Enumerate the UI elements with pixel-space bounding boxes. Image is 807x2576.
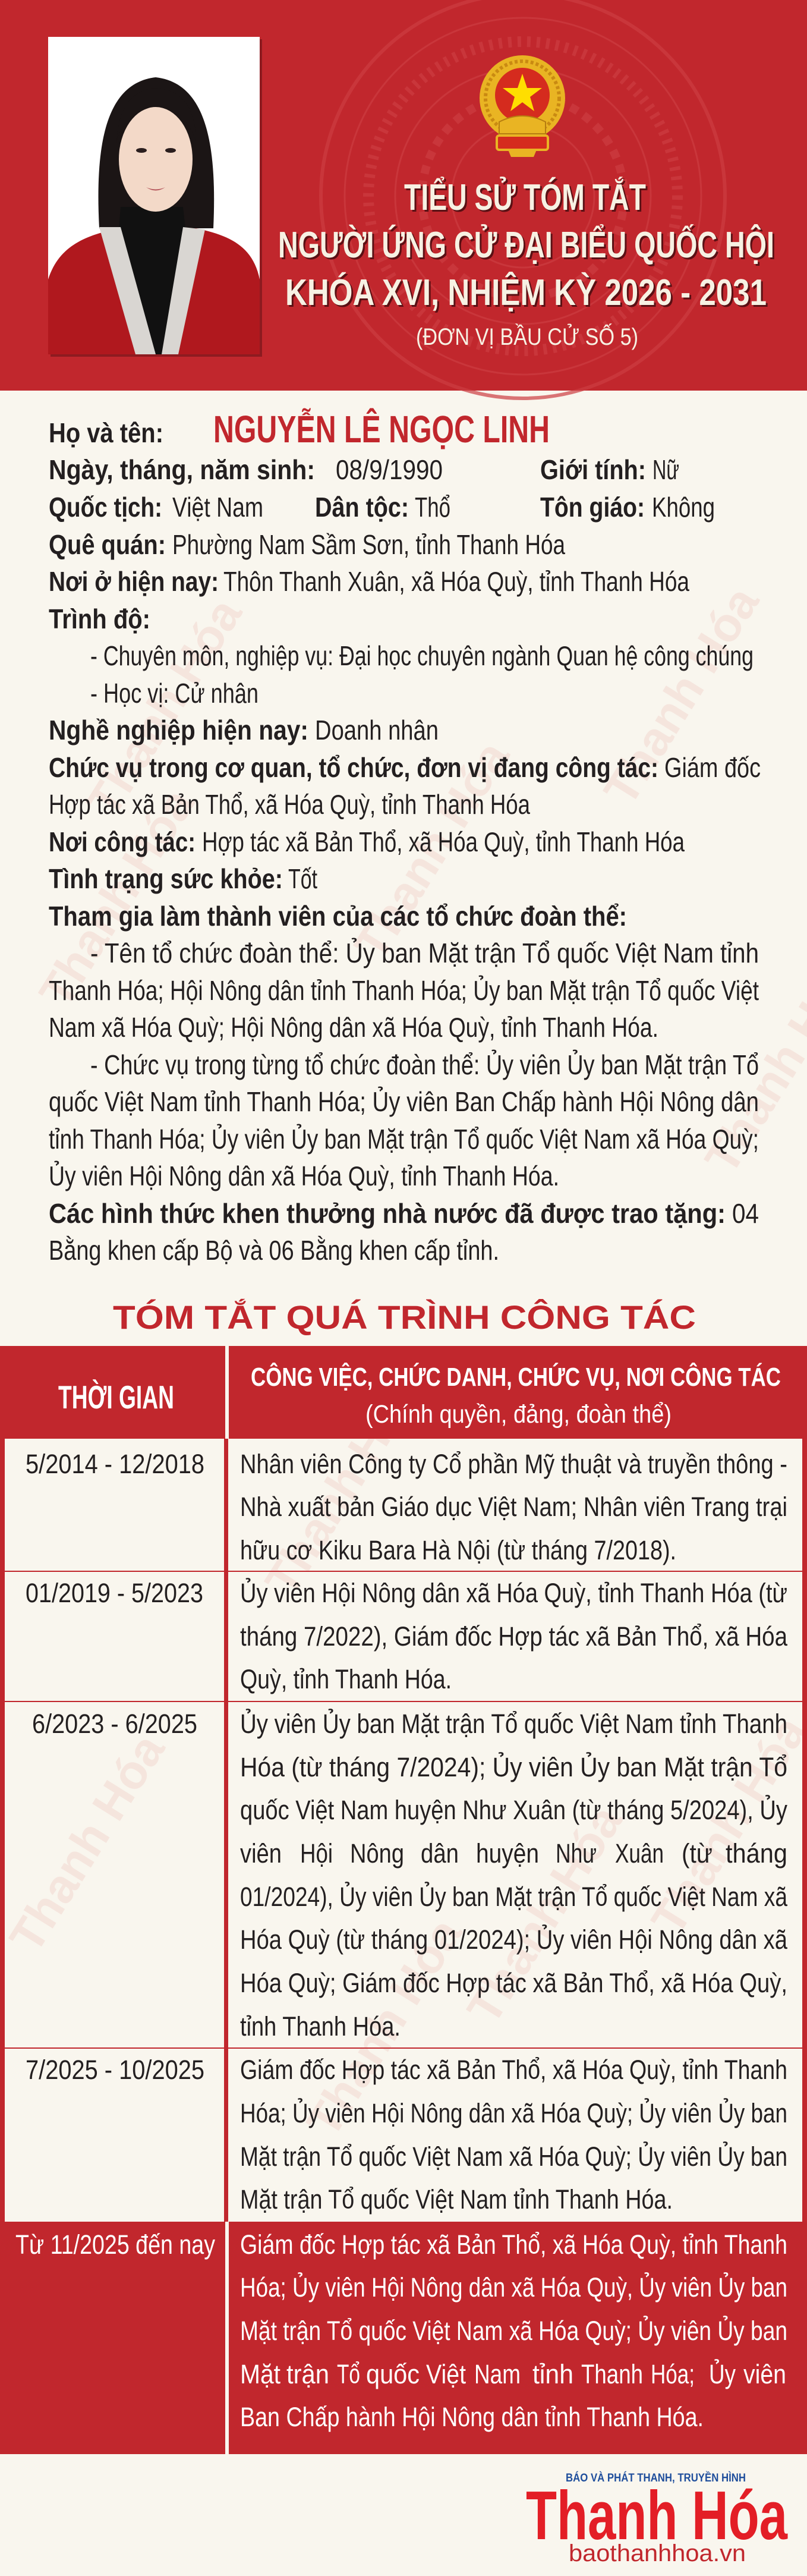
title: TIỂU SỬ TÓM TẮT xyxy=(404,177,646,218)
birth date and gender: Giới tính: xyxy=(540,454,646,485)
education: Trình độ: xyxy=(49,603,150,634)
row 3: huyện xyxy=(476,1838,539,1869)
watermarks: Thanh Hóa xyxy=(77,589,252,826)
row 3: tháng xyxy=(726,1838,787,1869)
awards xyxy=(49,1198,759,1266)
row 3: Như xyxy=(556,1838,597,1869)
watermarks: Thanh Hóa xyxy=(297,1909,472,2146)
residence: Thôn Thanh Xuân, xã Hóa Quỳ, tỉnh Thanh Hóa xyxy=(223,566,689,597)
row 5 (current, highlighted) xyxy=(0,2222,807,2454)
row 5 (current, highlighted): Hóa; xyxy=(651,2359,695,2389)
organizations membership: Nam xã Hóa Quỳ; Hội Nông dân xã Hóa Quỳ, tỉnh Thanh Hóa. xyxy=(49,1012,658,1043)
row 5 (current, highlighted): trận xyxy=(286,2359,329,2389)
row 2: Quỳ, tỉnh Thanh Hóa. xyxy=(240,1664,452,1694)
residence xyxy=(49,566,689,597)
row 5 (current, highlighted): Thanh xyxy=(581,2359,643,2389)
watermarks: Thanh Hóa xyxy=(29,779,204,1016)
workplace xyxy=(49,826,685,857)
education xyxy=(49,603,754,709)
row 1: hữu cơ Kiku Bara Hà Nội (từ tháng 7/2018). xyxy=(240,1535,676,1565)
row 4: Mặt trận Tổ quốc Việt Nam tỉnh Thanh Hóa. xyxy=(240,2184,673,2215)
table header: (Chính quyền, đảng, đoàn thể) xyxy=(365,1400,672,1429)
organizations membership: Tham gia làm thành viên của các tổ chức đoàn thể: xyxy=(49,901,627,932)
watermarks: Thanh Hóa xyxy=(594,577,769,814)
position: Hợp tác xã Bản Thổ, xã Hóa Quỳ, tỉnh Thanh Hóa xyxy=(49,789,530,820)
awards: Các hình thức khen thưởng nhà nước đã được trao tặng: xyxy=(49,1198,726,1229)
row 3: (từ xyxy=(682,1838,713,1869)
publisher logo: BÁO VÀ PHÁT THANH, TRUYỀN HÌNH xyxy=(566,2471,746,2484)
row 5 (current, highlighted): Việt xyxy=(426,2359,466,2389)
work history table xyxy=(0,1346,807,2454)
personal info block xyxy=(49,407,761,1266)
organizations membership xyxy=(49,901,759,1191)
row 5 (current, highlighted): Mặt xyxy=(240,2359,280,2389)
row 5 (current, highlighted): quốc xyxy=(366,2359,420,2389)
row 1 xyxy=(26,1449,787,1565)
row 4 xyxy=(26,2055,787,2215)
nationality, ethnicity, religion: Quốc tịch: xyxy=(49,492,162,523)
row 1: 5/2014 - 12/2018 xyxy=(26,1449,204,1479)
table header: THỜI GIAN xyxy=(58,1379,174,1416)
nationality, ethnicity, religion: Thổ xyxy=(415,492,450,523)
row 3: 6/2023 - 6/2025 xyxy=(32,1709,197,1739)
title xyxy=(278,177,776,315)
nationality, ethnicity, religion xyxy=(49,492,715,523)
occupation: Doanh nhân xyxy=(315,715,439,746)
organizations membership: Ủy viên Hội Nông dân xã Hóa Quỳ, tỉnh Thanh Hóa. xyxy=(49,1160,559,1191)
row 3: Nông xyxy=(350,1838,404,1869)
hometown: Quê quán: xyxy=(49,529,166,560)
nationality, ethnicity, religion: Việt Nam xyxy=(172,492,263,523)
header banner xyxy=(0,0,807,398)
awards: 04 xyxy=(732,1198,759,1229)
row 3: tỉnh Thanh Hóa. xyxy=(240,2011,401,2042)
watermarks xyxy=(0,577,807,2146)
nationality, ethnicity, religion: Dân tộc: xyxy=(315,492,409,523)
watermarks: Thanh Hóa xyxy=(255,1368,430,1605)
title: TIỂU SỬ TÓM TẮT xyxy=(406,179,648,220)
publisher logo: baothanhhoa.vn xyxy=(569,2540,746,2566)
name xyxy=(49,407,550,451)
watermarks: Thanh Hóa xyxy=(0,1725,175,1961)
birth date and gender xyxy=(49,454,679,485)
row 4: 7/2025 - 10/2025 xyxy=(26,2055,204,2085)
row 5 (current, highlighted): Từ 11/2025 đến nay xyxy=(15,2229,215,2260)
section heading: work history: TÓM TẮT QUÁ TRÌNH CÔNG TÁC xyxy=(113,1298,696,1336)
row 3: Hội xyxy=(300,1838,333,1869)
education: - Học vị: Cử nhân xyxy=(90,678,259,709)
icon: national emblem xyxy=(480,55,565,157)
row 5 (current, highlighted): viên xyxy=(743,2359,786,2389)
awards: Bằng khen cấp Bộ và 06 Bằng khen cấp tỉnh. xyxy=(49,1235,499,1266)
position: Chức vụ trong cơ quan, tổ chức, đơn vị đang công tác: xyxy=(49,752,658,783)
row 5 (current, highlighted): tỉnh xyxy=(532,2359,573,2389)
health: Tốt xyxy=(288,863,317,894)
workplace: Hợp tác xã Bản Thổ, xã Hóa Quỳ, tỉnh Thanh Hóa xyxy=(202,826,685,857)
position xyxy=(49,752,761,820)
health: Tình trạng sức khỏe: xyxy=(49,863,283,894)
name: Họ và tên: xyxy=(49,417,163,448)
row 3: viên xyxy=(240,1838,282,1869)
row 2 xyxy=(26,1578,788,1694)
row 3: Xuân xyxy=(615,1838,664,1869)
position: Giám đốc xyxy=(664,752,761,783)
watermarks: Thanh Hóa xyxy=(344,732,519,968)
birth date and gender: Ngày, tháng, năm sinh: xyxy=(49,454,315,485)
table body frame xyxy=(0,1439,807,2222)
hometown: Phường Nam Sầm Sơn, tỉnh Thanh Hóa xyxy=(172,529,565,560)
name: NGUYỄN LÊ NGỌC LINH xyxy=(213,407,550,451)
row 5 (current, highlighted): Ban Chấp hành Hội Nông dân tỉnh Thanh Hóa. xyxy=(240,2402,704,2432)
row 5 (current, highlighted): Ủy xyxy=(709,2359,736,2389)
row 2: 01/2019 - 5/2023 xyxy=(26,1578,203,1608)
row 5 (current, highlighted): Nam xyxy=(474,2359,521,2389)
row 3: dân xyxy=(421,1838,459,1869)
watermarks: Thanh Hóa xyxy=(457,1796,632,2033)
birth date and gender: Nữ xyxy=(652,454,679,485)
nationality, ethnicity, religion: Không xyxy=(652,492,715,523)
table header xyxy=(0,1346,807,1439)
subtitle: electoral unit: (ĐƠN VỊ BẦU CỬ SỐ 5) xyxy=(416,323,638,350)
workplace: Nơi công tác: xyxy=(49,826,196,857)
nationality, ethnicity, religion: Tôn giáo: xyxy=(540,492,645,523)
hometown xyxy=(49,529,565,560)
birth date and gender: 08/9/1990 xyxy=(336,454,443,485)
row 3 xyxy=(32,1709,788,2042)
occupation: Nghề nghiệp hiện nay: xyxy=(49,715,308,746)
row 5 (current, highlighted): Tổ xyxy=(337,2359,360,2389)
residence: Nơi ở hiện nay: xyxy=(49,566,219,597)
candidate photo xyxy=(48,37,262,357)
